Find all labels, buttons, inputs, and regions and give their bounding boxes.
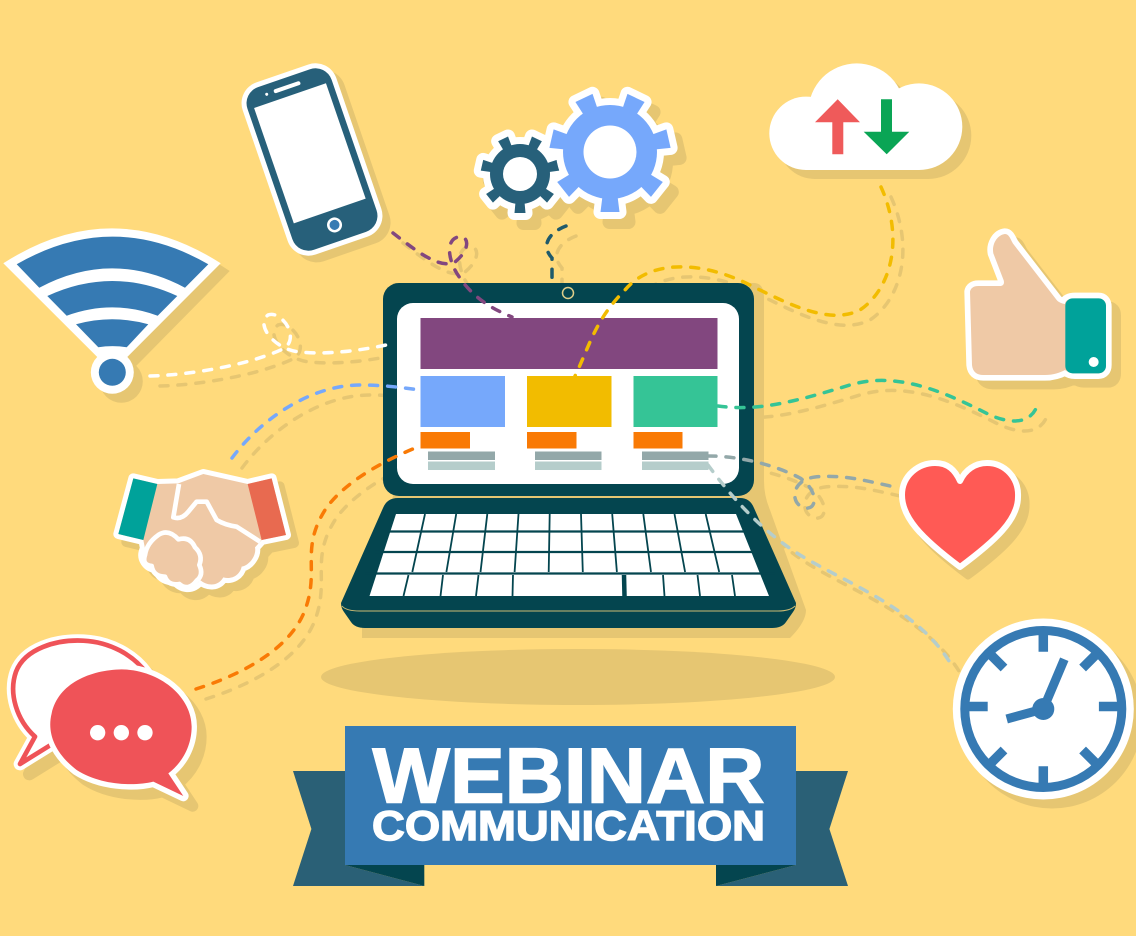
icon: speech bubbles — [13, 641, 201, 806]
gray text bars — [428, 452, 708, 460]
purple header block — [420, 318, 718, 369]
dashed connector: blue — [232, 385, 420, 458]
title: WEBINAR: WEBINAR — [372, 731, 764, 819]
blue content card — [420, 376, 505, 427]
icon: handshake — [118, 474, 294, 595]
laptop base — [341, 498, 796, 628]
laptop ground shadow — [321, 649, 835, 705]
banner panel — [345, 726, 796, 865]
dashed connector: orange — [196, 446, 420, 689]
laptop lid — [383, 283, 754, 496]
laptop — [341, 283, 806, 638]
icon: gears — [481, 94, 680, 223]
dashed line shadows — [160, 197, 1048, 699]
dashed connector: gray — [708, 456, 895, 508]
dashed connector: dark teal — [547, 226, 566, 278]
ribbon tails — [293, 771, 424, 886]
dashed connector: white — [150, 314, 395, 376]
light text bars — [428, 462, 708, 470]
dashed connector: yellow — [575, 187, 893, 376]
dashed connector: light gray — [708, 465, 952, 666]
green content card — [634, 376, 718, 427]
dashed connector: green — [718, 380, 1038, 421]
ribbon banner — [293, 726, 848, 886]
icon: clock — [953, 618, 1136, 808]
icon: heart — [902, 463, 1026, 576]
icon: cloud with arrows — [769, 63, 971, 179]
icon: smartphone — [236, 56, 397, 270]
orange labels — [420, 432, 682, 448]
ribbon folds — [345, 865, 424, 886]
dashed connector: purple — [393, 233, 512, 317]
laptop screen — [397, 303, 739, 484]
yellow content card — [527, 376, 612, 427]
icon: wifi — [3, 228, 230, 403]
icon: thumbs up — [970, 234, 1115, 384]
laptop cast shadow — [362, 283, 806, 638]
keyboard — [365, 514, 775, 596]
subtitle: COMMUNICATION: COMMUNICATION — [372, 802, 765, 849]
webcam — [562, 288, 574, 298]
